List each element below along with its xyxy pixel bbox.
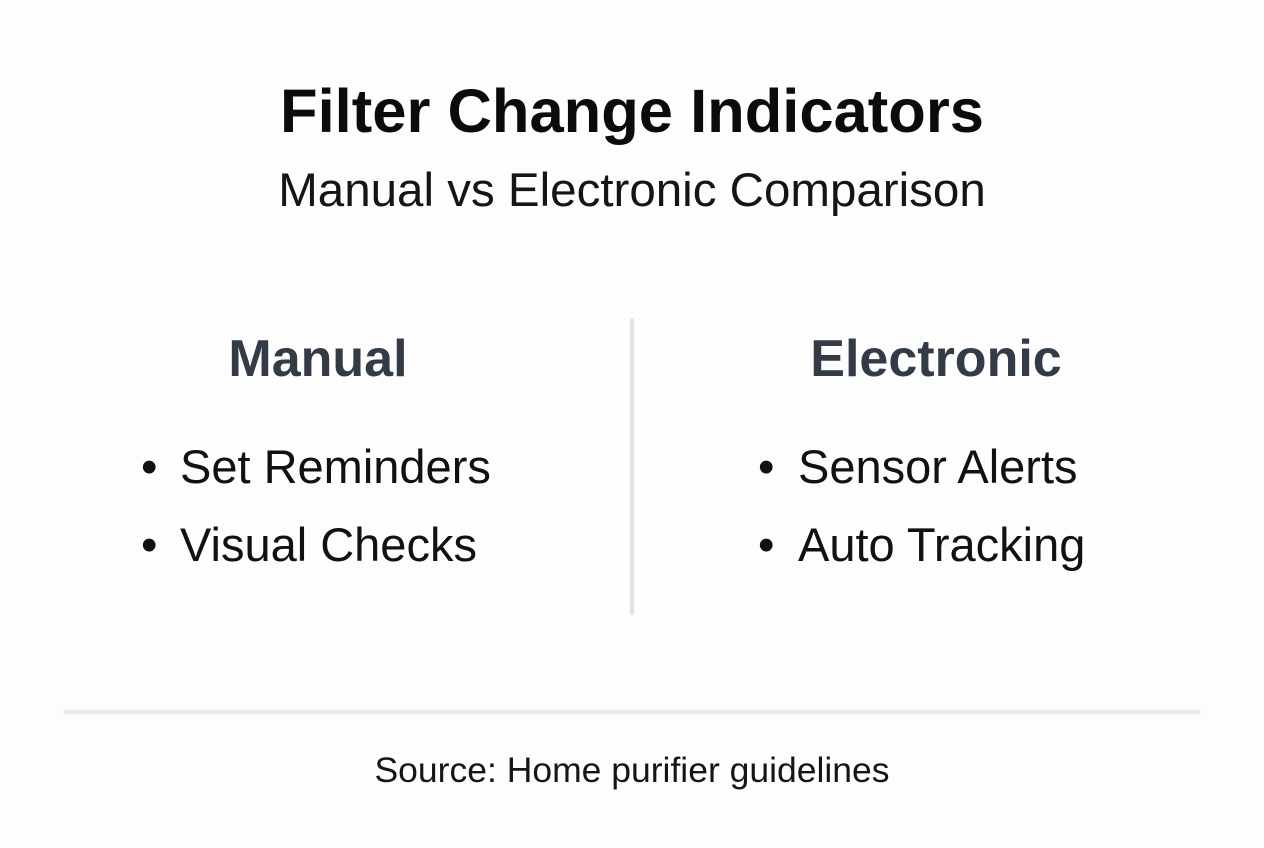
title: Filter Change Indicators — [280, 77, 984, 146]
bullet list: manual: Visual Checks — [180, 518, 477, 571]
source note: Source: Home purifier guidelines — [374, 750, 890, 790]
panel: manual — [141, 330, 491, 571]
bullet list: electronic: • — [758, 518, 774, 571]
subtitle: Manual vs Electronic Comparison — [278, 164, 986, 217]
bullet list: manual: Set Reminders — [180, 440, 491, 493]
bullet list: manual: • — [141, 440, 157, 493]
bullet list: electronic — [758, 440, 1085, 571]
bullet list: electronic: Sensor Alerts — [798, 440, 1078, 493]
panel: electronic — [758, 330, 1085, 571]
heading: manual: Manual — [228, 330, 408, 388]
bullet list: manual — [141, 440, 491, 571]
divider: horizontal — [63, 710, 1201, 714]
divider: vertical — [630, 318, 634, 615]
heading: electronic: Electronic — [810, 330, 1062, 388]
bullet list: electronic: • — [758, 440, 774, 493]
bullet list: electronic: Auto Tracking — [798, 518, 1085, 571]
bullet list: manual: • — [141, 518, 157, 571]
